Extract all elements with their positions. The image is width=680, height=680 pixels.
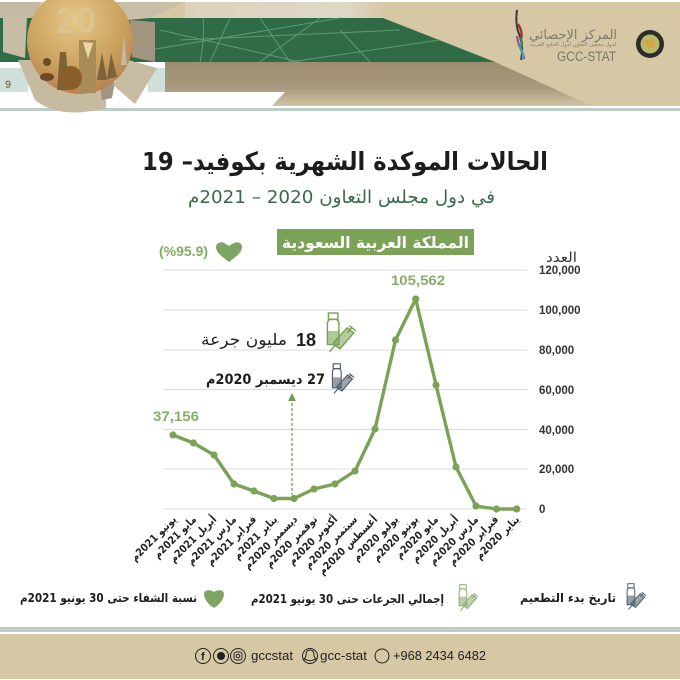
y axis labels: 0 xyxy=(539,504,545,516)
data points xyxy=(169,295,520,513)
x axis month labels: أبريل 2021م xyxy=(166,513,219,565)
callout: total doses: 18 xyxy=(296,330,316,350)
logo: GCC-STAT: GCC-STAT xyxy=(557,49,616,64)
data line xyxy=(173,299,517,509)
logo: GCC-STAT xyxy=(516,10,664,64)
legend: recovery rate: نسبة الشفاء حتى 30 يونيو 2021م xyxy=(20,591,197,606)
legend: vaccination start: تاريخ بدء التطعيم xyxy=(520,591,616,605)
y axis labels: 100,000 xyxy=(539,305,581,317)
x axis month labels: يونيو 2021م xyxy=(129,514,179,564)
callout: vaccination start date xyxy=(206,364,354,393)
header emblem: golden globe with towers xyxy=(0,0,185,112)
line chart: monthly confirmed cases xyxy=(129,250,581,578)
x axis month labels: أبريل 2020م xyxy=(408,513,461,565)
footer: f xyxy=(201,651,205,663)
x axis month labels xyxy=(129,513,522,578)
legend: total doses: إجمالي الجرعات حتى 30 يونيو 2021م xyxy=(251,592,444,607)
x axis month labels: أغسطس 2020م xyxy=(315,513,380,578)
chart gridlines xyxy=(163,270,527,509)
subtitle: في دول مجلس التعاون 2020 – 2021م xyxy=(188,187,495,208)
legend: vaccination start xyxy=(520,584,646,610)
x axis month labels: سبتمبر 2020م xyxy=(303,514,360,571)
x axis month labels: أكتوبر 2020م xyxy=(285,513,340,568)
footer: gcc-stat xyxy=(320,648,367,663)
icon: leaf heart xyxy=(216,242,242,262)
y axis labels: 60,000 xyxy=(539,385,574,397)
callout: total doses: مليون جرعة xyxy=(201,330,287,350)
y axis labels: 20,000 xyxy=(539,464,574,476)
recovery rate callout xyxy=(159,242,242,262)
callout: total doses xyxy=(201,313,356,352)
country label: Saudi Arabia: المملكة العربية السعودية xyxy=(282,233,469,252)
x axis month labels: فبراير 2020م xyxy=(447,514,501,568)
x axis month labels: مايو 2020م xyxy=(394,514,441,561)
x axis month labels: ديسمبر 2020م xyxy=(242,514,300,572)
recovery rate callout: (%95.9) xyxy=(159,243,208,259)
social icons xyxy=(196,648,389,664)
title: الحالات الموكدة الشهرية بكوفيد– 19 xyxy=(142,147,548,177)
x axis month labels: مارس 2021م xyxy=(186,514,239,568)
header banner xyxy=(0,0,680,112)
x axis month labels: مايو 2021م xyxy=(152,514,199,561)
footer xyxy=(0,627,680,679)
x axis month labels: يناير 2021م xyxy=(232,514,280,562)
contact text: gccstat xyxy=(251,648,293,663)
data label: peak value: 105,562 xyxy=(391,272,445,288)
data label: first value: 37,156 xyxy=(153,408,199,424)
header banner: 9 xyxy=(5,79,11,91)
logo: GCC-STAT: لدول مجلس التعاون لدول الخليج العربية xyxy=(530,42,616,48)
logo: GCC-STAT: المركز الإحصائي xyxy=(529,28,617,43)
icon: vial and syringe green xyxy=(326,312,356,352)
icon: vial and syringe grey xyxy=(332,363,354,394)
x axis month labels: مارس 2020م xyxy=(428,514,481,568)
arrow: vaccination start xyxy=(288,393,296,495)
y axis title: العدد xyxy=(546,250,577,266)
x axis month labels: يونيو 2020م xyxy=(371,514,421,564)
x axis month labels: فبراير 2021م xyxy=(205,514,259,568)
x axis month labels: يناير 2020م xyxy=(474,514,522,562)
y axis labels: 120,000 xyxy=(539,265,581,277)
legend xyxy=(20,584,646,611)
x axis month labels: يوليو 2020م xyxy=(351,514,401,564)
x axis month labels: نوفمبر 2020م xyxy=(264,514,320,570)
footer: +968 2434 6482 xyxy=(393,648,486,663)
legend: total doses xyxy=(251,585,478,611)
header emblem: golden globe with towers: 20 xyxy=(56,0,96,41)
callout: vaccination start date: 27 ديسمبر 2020م xyxy=(206,372,325,388)
y axis labels: 80,000 xyxy=(539,345,574,357)
y axis labels xyxy=(539,265,581,516)
y axis labels: 40,000 xyxy=(539,425,574,437)
